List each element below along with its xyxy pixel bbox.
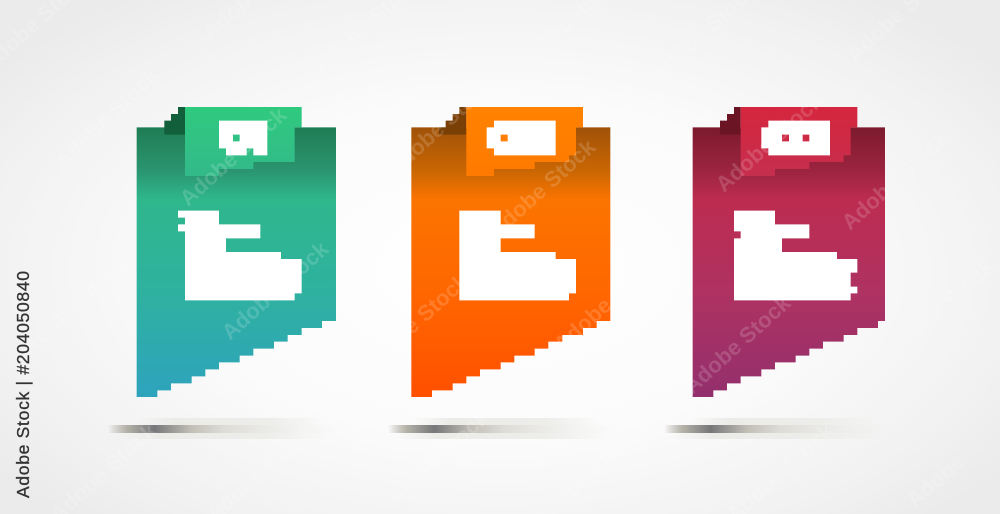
- panel: crimson marker: [693, 107, 885, 397]
- crimson tab: [741, 107, 857, 176]
- watermarks: Adobe Stock: [549, 248, 666, 357]
- watermarks: Adobe Stock: [217, 236, 334, 345]
- stock id side label: Adobe Stock | #204050840: [13, 271, 33, 498]
- watermarks: Adobe Stock: [50, 62, 164, 175]
- watermarks: Adobe Stock: [837, 126, 954, 235]
- watermarks: Adobe Stock: [382, 72, 499, 181]
- panel: green marker: [137, 107, 336, 397]
- watermarks: Adobe Stock: [711, 88, 828, 197]
- orange tab fold shadow: [439, 107, 466, 135]
- icon: large white glyph on green marker: [178, 211, 302, 300]
- icon: small white glyph on crimson tab: [761, 121, 830, 155]
- watermarks: Adobe: [901, 448, 969, 513]
- watermarks: Adobe Stock: [17, 250, 134, 359]
- watermarks: Adobe Stock: [882, 254, 999, 363]
- shadow under crimson marker: [664, 418, 896, 439]
- shadow under orange marker: [388, 418, 620, 439]
- crimson tab fold shadow: [720, 107, 741, 135]
- icon: large white glyph on orange marker: [459, 211, 576, 300]
- icon: small white glyph on orange tab: [487, 121, 556, 155]
- crimson marker body: [693, 127, 885, 397]
- orange tab: [466, 107, 583, 176]
- icon: large white glyph on crimson marker: [734, 211, 857, 300]
- watermarks: Adobe Stock: [377, 405, 494, 514]
- icon: small white glyph on green tab: [219, 121, 267, 155]
- watermarks: Adobe Stock: [679, 290, 796, 399]
- green marker body: [137, 127, 336, 397]
- shadow under green marker: [108, 418, 340, 439]
- orange marker body: [411, 127, 610, 397]
- panel: orange marker: [411, 107, 610, 397]
- watermarks: Adobe Stock: [357, 268, 474, 377]
- watermarks: Adobe Stock: [484, 134, 601, 243]
- green tab fold shadow: [164, 107, 185, 135]
- watermarks: Adobe Stock: [175, 102, 292, 211]
- green tab: [185, 107, 302, 176]
